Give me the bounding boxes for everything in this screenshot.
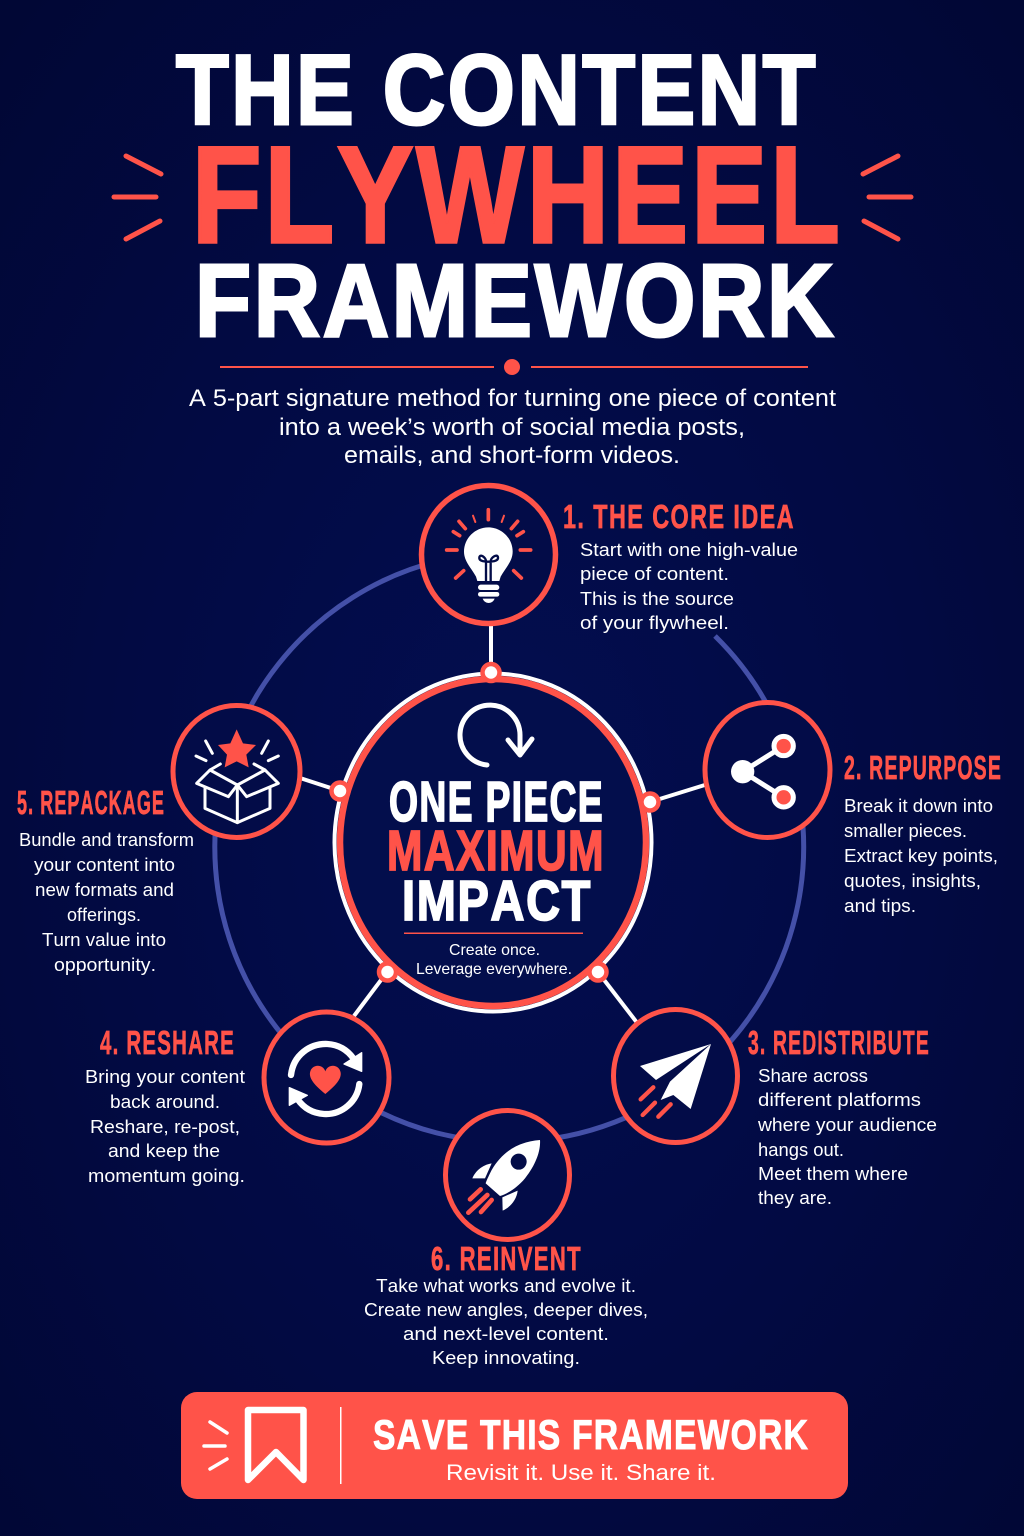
subtitle xyxy=(189,385,836,469)
subtitle: emails, and short-form videos. xyxy=(344,442,680,469)
step 1 heading: 1. THE CORE IDEA xyxy=(563,498,795,535)
step 6 text: Keep innovating. xyxy=(432,1347,580,1368)
panel: step 4 icon, reshare xyxy=(264,1012,389,1143)
call to action subline: Revisit it. Use it. Share it. xyxy=(446,1460,716,1485)
hub headline: IMPACT xyxy=(402,869,592,933)
hub tagline: Leverage everywhere. xyxy=(416,961,572,978)
hub headline: ONE PIECE xyxy=(389,770,604,834)
icon: share nodes xyxy=(731,736,793,807)
hub tagline: Create once. xyxy=(449,942,540,959)
icon: paper plane xyxy=(640,1044,711,1117)
step 4 text xyxy=(85,1066,245,1186)
panel: step 1 icon, the core idea xyxy=(422,486,556,624)
step 5 text: new formats and xyxy=(35,879,174,900)
step 1 text: of your flywheel. xyxy=(580,612,729,633)
step 1 text: Start with one high-value xyxy=(580,539,798,560)
step 4 text: and keep the xyxy=(108,1140,220,1161)
step 5 text: offerings. xyxy=(67,904,141,925)
step 3 text: Share across xyxy=(758,1065,868,1086)
connectors xyxy=(300,626,708,1024)
step 2 text: Extract key points, xyxy=(844,845,998,866)
icon: light bulb xyxy=(447,510,531,603)
hub headline xyxy=(387,770,605,933)
step 2 text: Break it down into xyxy=(844,795,993,816)
title divider xyxy=(220,359,808,375)
step 6 heading: 6. REINVENT xyxy=(431,1240,582,1277)
step 3 text: where your audience xyxy=(757,1114,937,1135)
step 4 heading: 4. RESHARE xyxy=(100,1024,235,1061)
step 3 text: they are. xyxy=(758,1187,832,1208)
panel: central hub xyxy=(334,674,652,1012)
step 5 heading: 5. REPACKAGE xyxy=(17,784,165,821)
step 1 text: This is the source xyxy=(580,588,734,609)
flywheel outer ring xyxy=(215,560,804,1142)
step 5 text: your content into xyxy=(34,854,175,875)
step 4 text: Reshare, re-post, xyxy=(90,1116,240,1137)
icon: cycle with heart xyxy=(289,1044,362,1114)
step 2 text: quotes, insights, xyxy=(844,870,981,891)
icon: right title sparks xyxy=(863,156,911,239)
step 1 text xyxy=(580,539,798,633)
step 1 text: piece of content. xyxy=(580,563,729,584)
panel: step 3 icon, redistribute xyxy=(614,1010,738,1142)
step 2 text: and tips. xyxy=(844,895,916,916)
step 4 text: momentum going. xyxy=(88,1165,245,1186)
panel: step 5 icon, repackage xyxy=(173,706,300,838)
step 4 text: back around. xyxy=(110,1091,220,1112)
step 4 text: Bring your content xyxy=(85,1066,245,1087)
title xyxy=(176,34,843,358)
hub headline: MAXIMUM xyxy=(387,819,605,883)
icon: open box with star xyxy=(196,729,278,823)
icon: loop arrow xyxy=(460,705,532,765)
step 6 text xyxy=(364,1275,648,1368)
subtitle: into a week’s worth of social media posts, xyxy=(279,414,745,441)
call to action headline: SAVE THIS FRAMEWORK xyxy=(373,1411,809,1458)
icon: bookmark xyxy=(248,1410,304,1480)
title: THE CONTENT xyxy=(176,34,818,145)
hub tagline xyxy=(416,942,572,978)
step 3 text: hangs out. xyxy=(758,1139,844,1160)
step 5 text: Turn value into xyxy=(42,929,166,950)
step 5 text xyxy=(19,829,194,975)
step 3 text xyxy=(757,1065,937,1208)
step 3 text: Meet them where xyxy=(758,1163,908,1184)
step 5 text: opportunity. xyxy=(54,954,156,975)
icon: rocket xyxy=(468,1140,540,1213)
icon: left title sparks xyxy=(114,156,161,239)
panel: step 6 icon, reinvent xyxy=(446,1110,570,1240)
step 2 text: smaller pieces. xyxy=(844,820,967,841)
panel: step 2 icon, repurpose xyxy=(705,702,830,838)
subtitle: A 5-part signature method for turning one piece of content xyxy=(189,385,836,412)
icon: bookmark sparks xyxy=(204,1422,227,1469)
hub nodes xyxy=(332,664,658,980)
step 6 text: Take what works and evolve it. xyxy=(376,1275,636,1296)
step 5 text: Bundle and transform xyxy=(19,829,194,850)
panel: call to action banner xyxy=(181,1392,848,1499)
step 3 text: different platforms xyxy=(758,1089,921,1110)
step 6 text: Create new angles, deeper dives, xyxy=(364,1299,648,1320)
title: FLYWHEEL xyxy=(192,119,843,272)
title: FRAMEWORK xyxy=(195,243,836,358)
step 2 text xyxy=(844,795,998,916)
step 6 text: and next-level content. xyxy=(403,1323,609,1344)
